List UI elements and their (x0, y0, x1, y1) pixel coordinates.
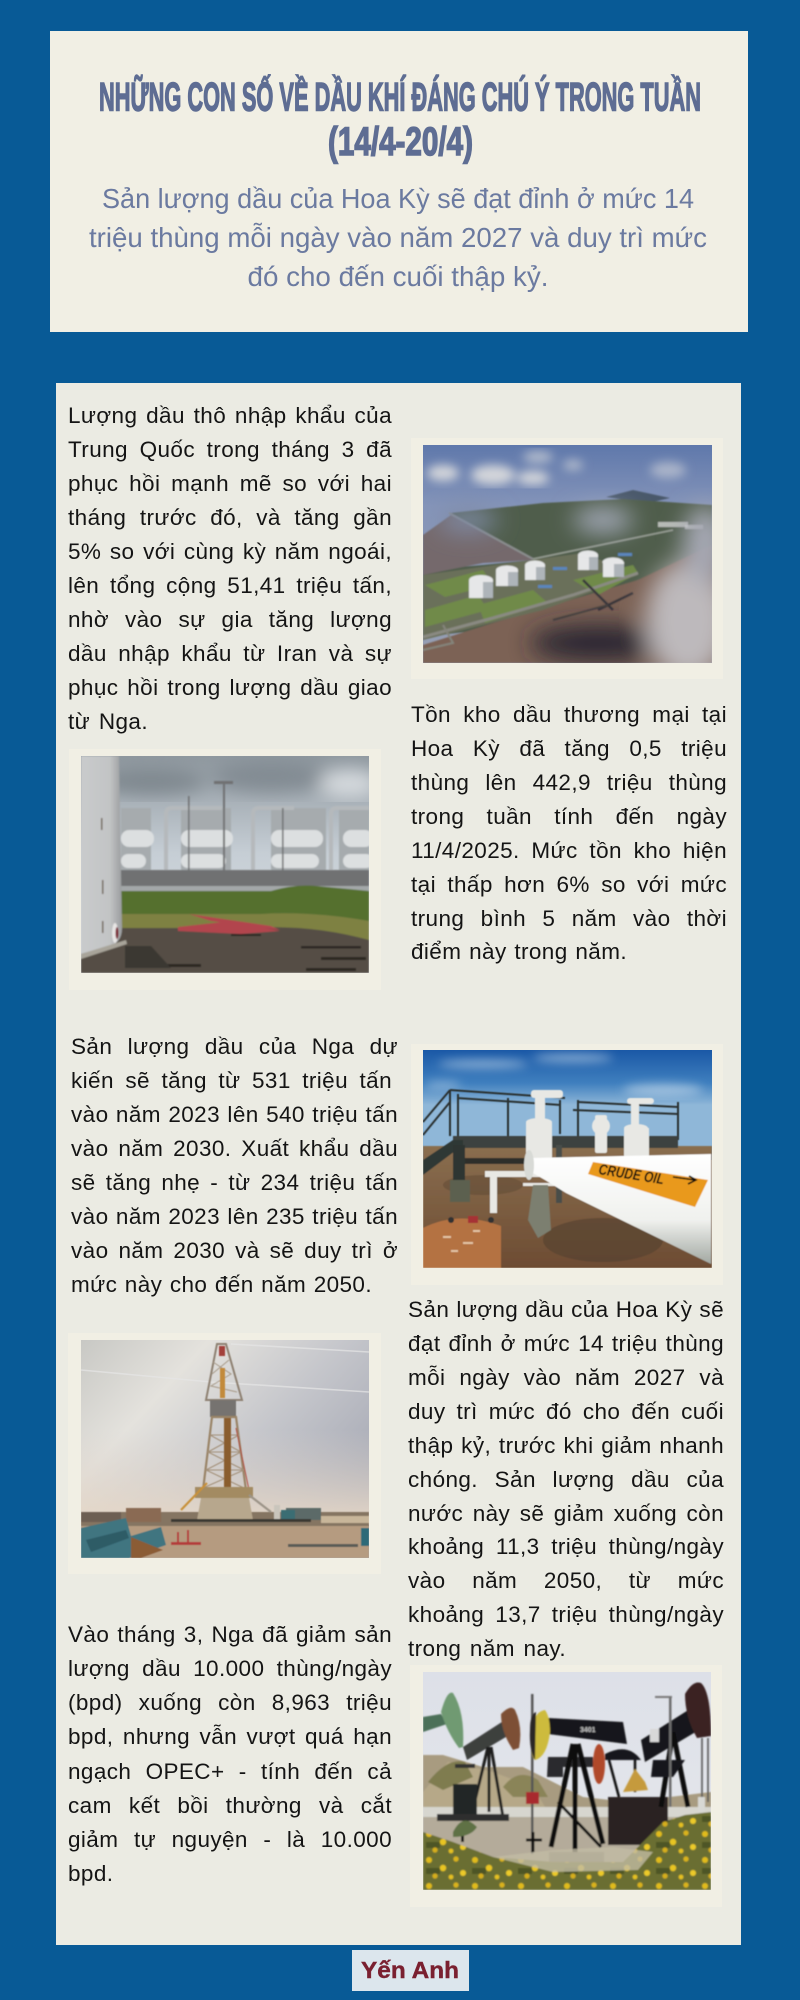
subtitle: triệu thùng mỗi ngày vào năm 2027 và duy trì mức (89, 222, 707, 253)
pump 1 green (423, 1693, 463, 1748)
text block: US commercial stocks: Hoa Kỳ đã tăng 0,5 triệu (411, 736, 727, 761)
text block: US output peak: vào năm 2050, từ mức (408, 1568, 724, 1593)
text block: Russia OPEC+ quota: bpd. (68, 1861, 113, 1886)
photo card: refinery (69, 749, 381, 990)
text block: China crude imports: 5% so với cùng kỳ năm ngoái, (68, 539, 392, 564)
text block: Russia OPEC+ quota: ngạch OPEC+ - tính đến cả (68, 1759, 392, 1784)
text block: US output peak: khoảng 11,3 triệu thùng/ngày (408, 1534, 724, 1559)
text block: Russia OPEC+ quota: cam kết bồi thường và cắt (68, 1793, 392, 1818)
back pump (547, 1744, 605, 1784)
text block: US output peak: mỗi ngày vào năm 2027 và (408, 1365, 724, 1390)
text block: Russia OPEC+ quota: bpd, nhưng vẫn vượt quá hạn (68, 1724, 392, 1749)
text block: China crude imports: Trung Quốc trong tháng 3 đã (68, 437, 392, 462)
text block: Russian output forecast (71, 1034, 398, 1297)
subtitle (89, 183, 707, 292)
text block: US output peak: thập kỷ, trước khi giảm nhanh (408, 1433, 724, 1458)
text block: US output peak: Sản lượng dầu của Hoa Kỳ sẽ (408, 1297, 724, 1322)
text block: US commercial stocks: thùng lên 442,9 triệu thùng (411, 770, 727, 795)
text block: Russian output forecast: vào năm 2023 lên 235 triệu tấn (71, 1204, 398, 1229)
photo card: LNG terminal aerial (411, 438, 723, 679)
text block: Russian output forecast: vào năm 2023 lên 540 triệu tấn (71, 1102, 398, 1127)
text block: Russian output forecast: kiến sẽ tăng từ 531 triệu tấn (71, 1068, 392, 1093)
title (99, 74, 701, 164)
text block: US output peak: duy trì mức đó cho đến cuối (408, 1399, 724, 1424)
text block: Russia OPEC+ quota: (bpd) xuống còn 8,963 triệu (68, 1690, 392, 1715)
text block: China crude imports (68, 403, 392, 734)
text block: Russia OPEC+ quota: lượng dầu 10.000 thùng/ngày (68, 1656, 392, 1681)
photo: pump jacks and wildflowers (423, 1672, 711, 1890)
text block: China crude imports: lên tổng cộng 51,41 triệu tấn, (68, 573, 392, 598)
text block: Russian output forecast: mức này cho đến năm 2050. (71, 1272, 372, 1297)
photo: drilling rig in desert (81, 1340, 369, 1558)
text block: US commercial stocks (411, 702, 727, 964)
text block: Russia OPEC+ quota: giảm tự nguyện - là 10.000 (68, 1827, 392, 1852)
text block: Russian output forecast: sẽ tăng nhẹ - từ 234 triệu tấn (71, 1170, 398, 1195)
text block: US commercial stocks: tại thấp hơn 6% so với mức (411, 872, 727, 897)
text block: China crude imports: dầu nhập khẩu từ Iran và sự (68, 641, 392, 666)
text block: Russia OPEC+ quota: Vào tháng 3, Nga đã giảm sản (68, 1622, 392, 1647)
text block: US output peak: nước này sẽ giảm xuống còn (408, 1501, 724, 1526)
text block: Russia OPEC+ quota (68, 1622, 392, 1886)
photo card: crude oil pipeline (411, 1044, 723, 1285)
text block: China crude imports: phục hồi mạnh mẽ so với hai (68, 471, 392, 496)
pump 2 (437, 1708, 520, 1842)
text block: Russian output forecast: vào năm 2030. Xuất khẩu dầu (71, 1136, 398, 1161)
text block: US output peak: khoảng 13,7 triệu thùng/ngày (408, 1602, 724, 1627)
author badge (352, 1950, 469, 1991)
photo: aerial terminal (423, 445, 712, 663)
subtitle: đó cho đến cuối thập kỷ. (248, 261, 548, 292)
header panel (50, 31, 748, 332)
pump 4 (641, 1682, 711, 1812)
text block: US output peak (408, 1297, 724, 1661)
photo: refinery storage (81, 756, 369, 973)
text block: US commercial stocks: điểm này trong năm. (411, 939, 627, 964)
text block: Russian output forecast: Sản lượng dầu của Nga dự (71, 1034, 398, 1059)
photo: crude oil pipe (423, 1050, 712, 1268)
gearbox (605, 1749, 668, 1845)
pump 3 main (530, 1710, 627, 1866)
photo card: drilling rig (68, 1333, 381, 1574)
text block: US commercial stocks: trung bình 5 năm vào thời (411, 906, 727, 931)
text block: China crude imports: nhờ vào sự gia tăng lượng (68, 607, 392, 632)
text block: US output peak: trong năm nay. (408, 1636, 566, 1661)
text block: US output peak: đạt đỉnh ở mức 14 triệu thùng (408, 1331, 724, 1356)
subtitle: Sản lượng dầu của Hoa Kỳ sẽ đạt đỉnh ở mức 14 (102, 183, 694, 214)
author name: Yến Anh (361, 1957, 459, 1983)
text block: China crude imports: phục hồi trong lượng dầu giao (68, 675, 392, 700)
photo: crude oil pipe: CRUDE OIL (597, 1161, 665, 1188)
pump 3 main: 3401 (580, 1727, 596, 1734)
photo card: pump jacks (410, 1665, 722, 1907)
text block: US commercial stocks: Tồn kho dầu thương mại tại (411, 702, 727, 727)
main content panel (56, 383, 741, 1945)
text block: China crude imports: từ Nga. (68, 709, 148, 734)
text block: China crude imports: tháng trước đó, và tăng gần (68, 505, 392, 530)
text block: Russian output forecast: vào năm 2030 và sẽ duy trì ở (71, 1238, 398, 1263)
title: (14/4-20/4) (328, 120, 473, 164)
text block: China crude imports: Lượng dầu thô nhập khẩu của (68, 403, 392, 428)
grass and flowers (423, 1812, 711, 1890)
text block: US commercial stocks: trong tuần tính đến ngày (411, 804, 727, 829)
centre pole (526, 1694, 542, 1854)
text block: US output peak: chóng. Sản lượng dầu của (408, 1467, 724, 1492)
text block: US commercial stocks: 11/4/2025. Mức tồn kho hiện (411, 838, 727, 863)
